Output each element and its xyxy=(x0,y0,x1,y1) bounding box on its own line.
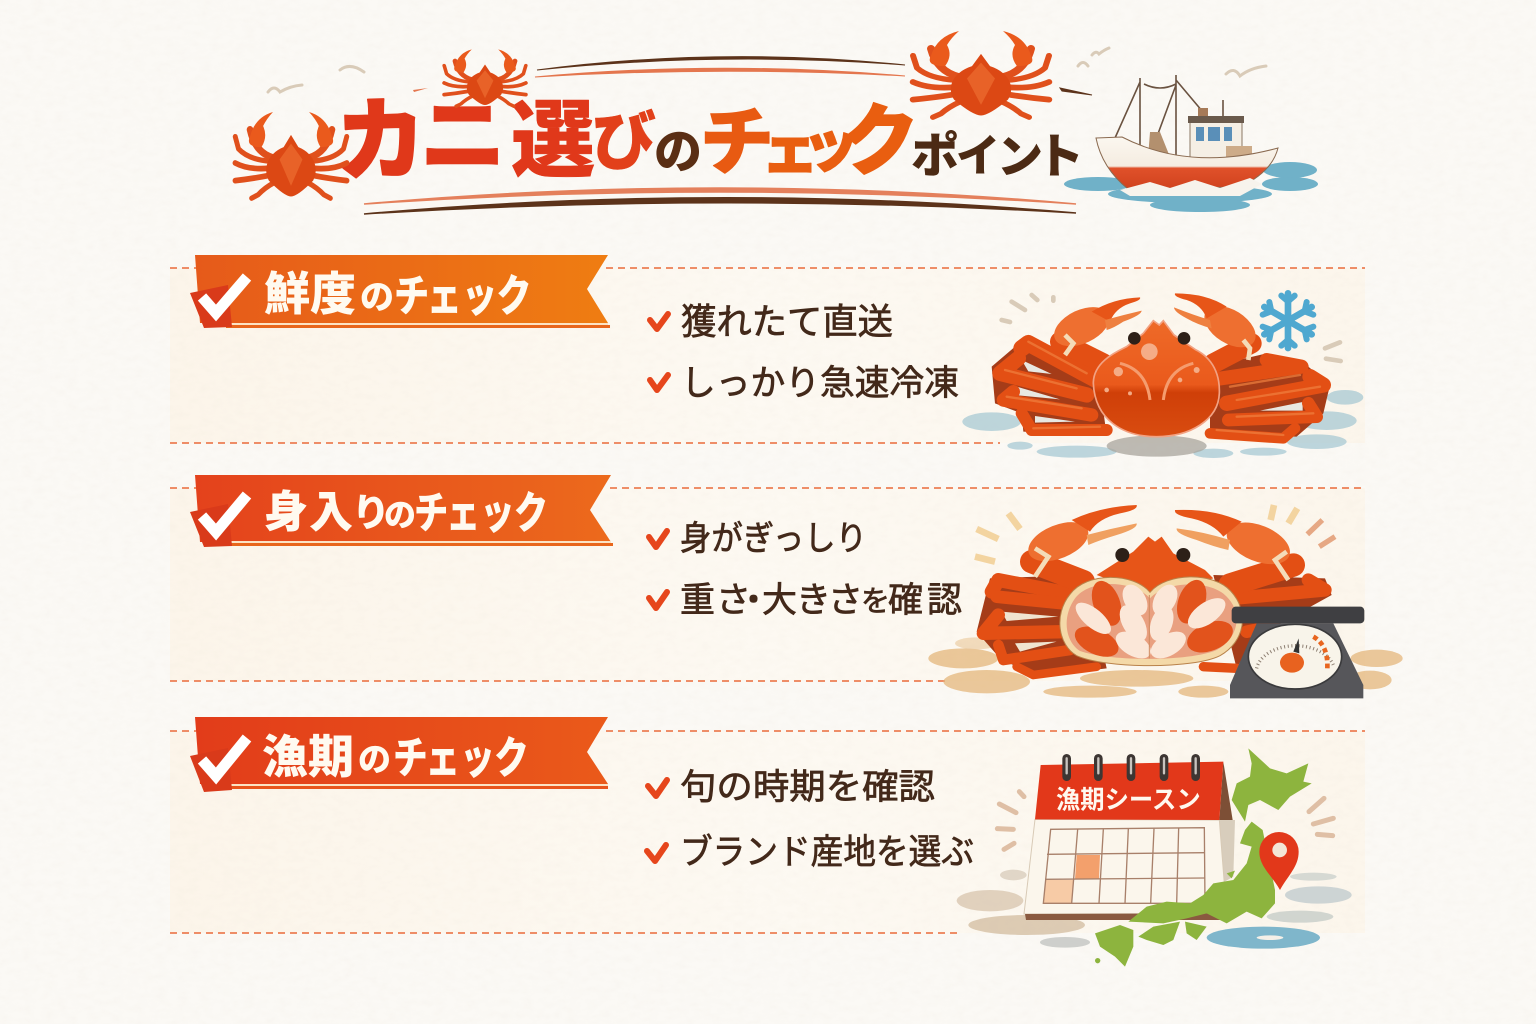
sand gaps between legs xyxy=(1002,612,1058,652)
item text: 身がぎっしり xyxy=(680,520,867,558)
claws xyxy=(1048,293,1263,363)
item text: 獲れたて直送 xyxy=(681,301,893,342)
open shell xyxy=(1060,576,1242,666)
icon: map pin xyxy=(1259,832,1299,890)
panel: season background xyxy=(170,731,1365,933)
icon: kitchen scale xyxy=(1230,607,1364,698)
heading text: の xyxy=(360,279,394,317)
icon: snowflake xyxy=(1263,293,1313,348)
head xyxy=(1097,537,1213,595)
check icon xyxy=(648,780,667,796)
icon: small top crab xyxy=(444,49,526,106)
icon: seagulls xyxy=(268,48,1266,92)
heading text xyxy=(264,268,532,321)
check icon xyxy=(649,531,667,547)
section 1: freshness heading ribbon xyxy=(190,255,610,328)
sparkle marks xyxy=(997,792,1333,849)
hull xyxy=(1096,137,1278,189)
item text: 句の時期を確認 xyxy=(680,768,935,807)
item text: しっかり急速冷凍 xyxy=(681,364,959,403)
check icon xyxy=(650,314,668,329)
illustration: season calendar and Japan map xyxy=(957,748,1352,967)
check icon xyxy=(647,845,666,861)
title text xyxy=(334,89,1084,194)
check icon xyxy=(649,592,667,608)
water under boat xyxy=(1064,162,1318,212)
heading text: 身入 xyxy=(264,488,353,537)
section 3: check items xyxy=(647,768,974,872)
icon: left title crab xyxy=(235,112,347,198)
heading text: 鮮度 xyxy=(264,268,356,320)
heading text: チェック xyxy=(394,272,532,321)
water shadow xyxy=(962,390,1363,458)
ribbon shape xyxy=(195,475,611,542)
heading text: の xyxy=(384,497,416,533)
date grid xyxy=(1043,828,1205,903)
heading text: の xyxy=(358,741,391,778)
title text: の xyxy=(654,126,702,179)
eyes xyxy=(1128,332,1190,345)
item text: を xyxy=(861,586,890,618)
title text: 選 xyxy=(511,94,595,188)
calendar xyxy=(1024,758,1235,920)
ribbon shape xyxy=(195,717,608,784)
title text: び xyxy=(592,106,656,178)
water and ground shadows xyxy=(957,870,1352,949)
carapace xyxy=(1093,321,1219,437)
ribbon shape xyxy=(195,255,608,323)
title text: ン xyxy=(997,131,1043,183)
claws xyxy=(1023,505,1296,585)
title text: カ xyxy=(334,90,428,194)
heading text xyxy=(264,488,548,538)
sparkle marks xyxy=(1002,295,1341,361)
icon: check badge xyxy=(190,495,247,547)
legs xyxy=(983,580,1325,675)
title decorative lines top xyxy=(413,57,1092,95)
title text: ェ xyxy=(761,118,819,183)
legs xyxy=(1000,343,1323,438)
section 1: check items xyxy=(650,301,959,403)
sparkle marks xyxy=(975,505,1297,562)
title text: ッ xyxy=(802,114,860,179)
title text: イ xyxy=(956,132,1000,181)
sand shadow xyxy=(928,637,1403,698)
section 3: season heading ribbon xyxy=(190,717,608,792)
ice gaps between legs xyxy=(1017,360,1303,423)
title group xyxy=(334,57,1092,214)
heading text xyxy=(262,731,529,783)
title text: ク xyxy=(841,97,919,185)
section 2: meat fill heading ribbon xyxy=(190,475,613,547)
shadow between legs xyxy=(977,575,1332,677)
title text: ト xyxy=(1036,131,1084,184)
panel: freshness background xyxy=(170,268,1365,443)
heading text: チェック xyxy=(393,734,529,783)
eyes xyxy=(1115,548,1190,562)
title text: ニ xyxy=(420,89,506,185)
section 2: check items xyxy=(649,520,962,620)
bow wave xyxy=(1120,178,1262,196)
binding rings xyxy=(1067,758,1196,777)
icon: check badge xyxy=(190,738,247,792)
highlighted days xyxy=(1075,855,1100,879)
shadow between legs xyxy=(992,337,1330,437)
item text: ブランド産地を選ぶ xyxy=(680,833,974,872)
title decorative lines bottom xyxy=(364,188,1076,214)
icon: fishing boat xyxy=(1064,75,1318,212)
title text: チ xyxy=(700,101,774,184)
icon: check badge xyxy=(190,277,247,328)
illustration: crab with open shell and scale xyxy=(928,505,1403,698)
panel: meat fill background xyxy=(170,488,1365,681)
illustration: crab on ice with snowflake xyxy=(962,293,1363,458)
calendar label: 漁期シースン xyxy=(1056,787,1201,815)
heading text: 漁期 xyxy=(262,731,354,783)
item text: 重さ・大きさ xyxy=(680,581,863,620)
title text: ポ xyxy=(911,130,959,183)
heading text: り xyxy=(352,493,390,535)
heading text: チェック xyxy=(414,489,548,538)
masts xyxy=(1115,75,1223,158)
item text: 確認 xyxy=(888,581,962,620)
icon: large top right crab xyxy=(913,31,1049,117)
check icon xyxy=(650,375,668,390)
Japan map xyxy=(1095,748,1312,967)
cabin xyxy=(1148,108,1252,166)
